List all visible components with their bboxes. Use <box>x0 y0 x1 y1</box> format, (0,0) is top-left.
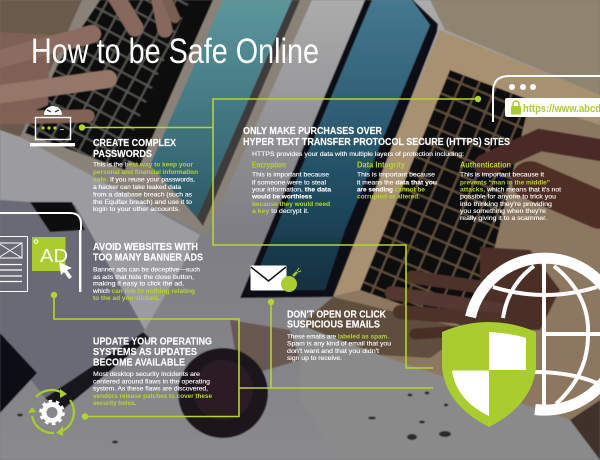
text block: avoid banner ads: TOO MANY BANNER ADS <box>93 253 203 264</box>
text block: update operating systems: BECOME AVAILABLE <box>93 358 185 369</box>
title: How to be Safe Online <box>31 32 319 71</box>
text block: update operating systems: security holes. <box>93 400 136 407</box>
text block: suspicious emails: don't want and that you didn't <box>287 348 379 355</box>
text block: avoid banner ads: to the ad you clicked. <box>93 295 159 302</box>
text block: avoid banner ads: which can link to nothing relating <box>92 288 195 295</box>
column: encryption: your information, the data <box>252 187 331 194</box>
text block: suspicious emails: These emails are labeled as spam. <box>287 333 389 340</box>
column: data integrity: it means the data that you <box>357 179 437 186</box>
text block: update operating systems: centered around flaws in the operating <box>93 379 210 386</box>
text block: create complex passwords: a hacker can take leaked data <box>93 184 181 191</box>
column: authentication: into thinking they're providing <box>460 201 552 208</box>
text block: suspicious emails: DON'T OPEN OR CLICK <box>287 309 387 320</box>
icon: hacker laptop <box>30 106 75 146</box>
icon: email with bomb <box>250 266 301 292</box>
text block: only make purchases over https: ONLY MAKE PURCHASES OVER <box>243 126 383 137</box>
text block: avoid banner ads: as ads that hide the close button, <box>93 274 194 281</box>
text block: only make purchases over https: HYPER TEXT TRANSFER PROTOCOL SECURE (HTTPS) SITES <box>243 137 510 148</box>
text block: create complex passwords: safe. If you reuse your passwords, <box>93 176 195 184</box>
text block: update operating systems <box>93 336 212 407</box>
icon: banner ad window <box>0 213 81 292</box>
text block: update operating systems: UPDATE YOUR OPERATING <box>93 336 212 347</box>
text block: only make purchases over https: HTTPS provides your data with multiple layers of protection including: <box>252 151 464 158</box>
column: authentication: This is important because it <box>460 172 544 179</box>
column: authentication <box>460 160 561 222</box>
text block: create complex passwords: from a database breach (such as <box>93 192 193 198</box>
text block: only make purchases over https <box>243 126 561 222</box>
column: encryption <box>251 160 331 215</box>
text block: update operating systems: system. As these flaws are discovered, <box>93 386 208 393</box>
text block: avoid banner ads: Banner ads can be deceptive—such <box>93 266 200 273</box>
icon: globe <box>470 258 600 412</box>
text block: create complex passwords: personal and financial information <box>93 169 198 176</box>
text block: suspicious emails: Spam is any kind of email that you <box>287 341 391 348</box>
column: authentication: prevents “man in the middle” <box>460 179 550 186</box>
column: encryption: This is important because <box>252 172 329 179</box>
text block: suspicious emails: sign up to receive. <box>287 355 342 362</box>
column: data integrity: are sending cannot be <box>357 187 425 194</box>
column: encryption: a key to decrypt it. <box>252 208 309 215</box>
column: authentication: attacks, which means that it's not <box>460 187 561 194</box>
text block: suspicious emails: SUSPICIOUS EMAILS <box>287 320 380 331</box>
text block: update operating systems: SYSTEMS AS UPDATES <box>93 347 197 358</box>
column: authentication: you something when they're <box>460 208 546 215</box>
text block: avoid banner ads: making it easy to click the ad, <box>93 281 184 288</box>
text block: avoid banner ads: AVOID WEBSITES WITH <box>93 242 198 253</box>
column: authentication: Authentication <box>460 160 511 170</box>
icon: banner ad window: AD <box>40 246 68 266</box>
column: data integrity: Data Integrity <box>357 160 406 170</box>
icon: browser window with https address <box>493 76 600 122</box>
column: encryption: would be worthless <box>251 194 312 201</box>
column: data integrity: This is important because <box>357 172 435 179</box>
text block: create complex passwords: login to your other accounts. <box>93 206 180 213</box>
text block: update operating systems: vendors release patches to cover these <box>93 393 212 400</box>
text block: suspicious emails <box>287 309 391 362</box>
text block: create complex passwords: PASSWORDS <box>93 149 152 160</box>
text block: create complex passwords: This is the best way to keep your <box>93 162 193 168</box>
column: authentication: really giving it to a scammer. <box>460 215 547 222</box>
text block: create complex passwords: the Equifax breach) and use it to <box>93 199 192 206</box>
column: encryption: Encryption <box>252 160 286 170</box>
column: data integrity: corrupted or altered. <box>357 194 420 201</box>
text block: avoid banner ads <box>92 242 203 302</box>
connector lines <box>51 96 481 420</box>
icon: security shield <box>442 322 536 427</box>
text block: create complex passwords: CREATE COMPLEX <box>93 138 176 149</box>
column: authentication: possible for anyone to trick you <box>460 194 556 201</box>
column: data integrity <box>357 160 437 201</box>
text block: update operating systems: Most desktop security incidents are <box>93 371 200 378</box>
column: encryption: because they would need <box>252 201 330 208</box>
icon: gear with update arrows <box>28 389 74 436</box>
column: encryption: if someone were to steal <box>252 179 327 186</box>
text block: create complex passwords <box>93 138 198 213</box>
